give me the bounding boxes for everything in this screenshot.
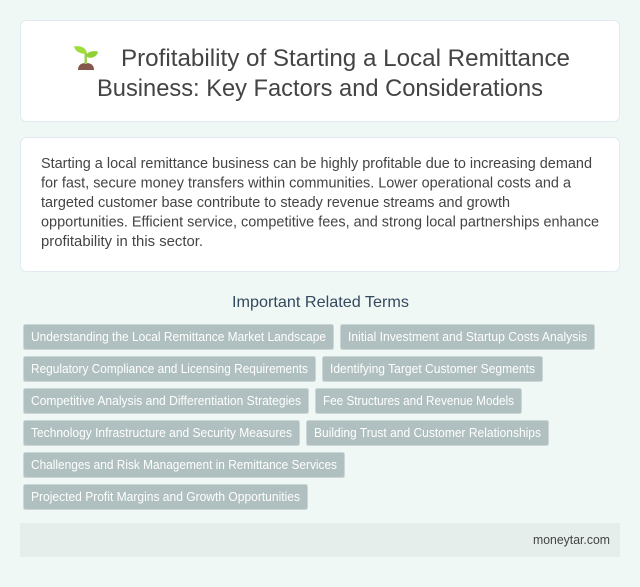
chip: [24, 324, 334, 350]
chip: [340, 324, 594, 350]
summary text: profitability in this sector.: [41, 233, 203, 250]
summary text: targeted customer base contribute to steady revenue streams and growth: [41, 194, 510, 211]
chip: Challenges and Risk Management in Remittance Services: [31, 458, 337, 472]
summary text: opportunities. Efficient service, competitive fees, and strong local partnerships enhance: [41, 214, 599, 230]
chip: Building Trust and Customer Relationships: [314, 426, 541, 440]
chips: related terms: [24, 324, 594, 510]
chip: [24, 452, 344, 478]
panel: summary: [20, 138, 620, 272]
title text: Profitability of Starting a Local Remittance: [121, 45, 570, 72]
chip: [24, 356, 316, 382]
chip: [24, 388, 308, 414]
summary text: Starting a local remittance business can be highly profitable due to increasing demand: [41, 155, 592, 172]
chip: Initial Investment and Startup Costs Analysis: [348, 330, 587, 344]
footer: moneytar.com: [533, 533, 610, 547]
icon: seedling: [74, 46, 98, 70]
chip: Understanding the Local Remittance Market Landscape: [31, 330, 326, 344]
chip: Projected Profit Margins and Growth Opportunities: [31, 490, 300, 504]
chip: Identifying Target Customer Segments: [330, 362, 535, 376]
chip: Regulatory Compliance and Licensing Requirements: [31, 362, 308, 376]
title text: Business: Key Factors and Considerations: [97, 75, 543, 102]
chip: [306, 420, 548, 446]
title text: [97, 45, 570, 102]
chip: [24, 484, 308, 510]
chip: [24, 420, 300, 446]
panel: title: [20, 20, 620, 122]
chip: Competitive Analysis and Differentiation Strategies: [31, 394, 301, 408]
summary text: for fast, secure money transfers within communities. Lower operational costs and a: [41, 174, 572, 192]
footer: [20, 523, 620, 557]
summary text: [41, 155, 599, 250]
chip: [316, 388, 522, 414]
chip: Fee Structures and Revenue Models: [323, 394, 514, 408]
chip: Technology Infrastructure and Security Measures: [31, 426, 292, 440]
heading: related terms: Important Related Terms: [232, 294, 409, 311]
chip: [322, 356, 542, 382]
